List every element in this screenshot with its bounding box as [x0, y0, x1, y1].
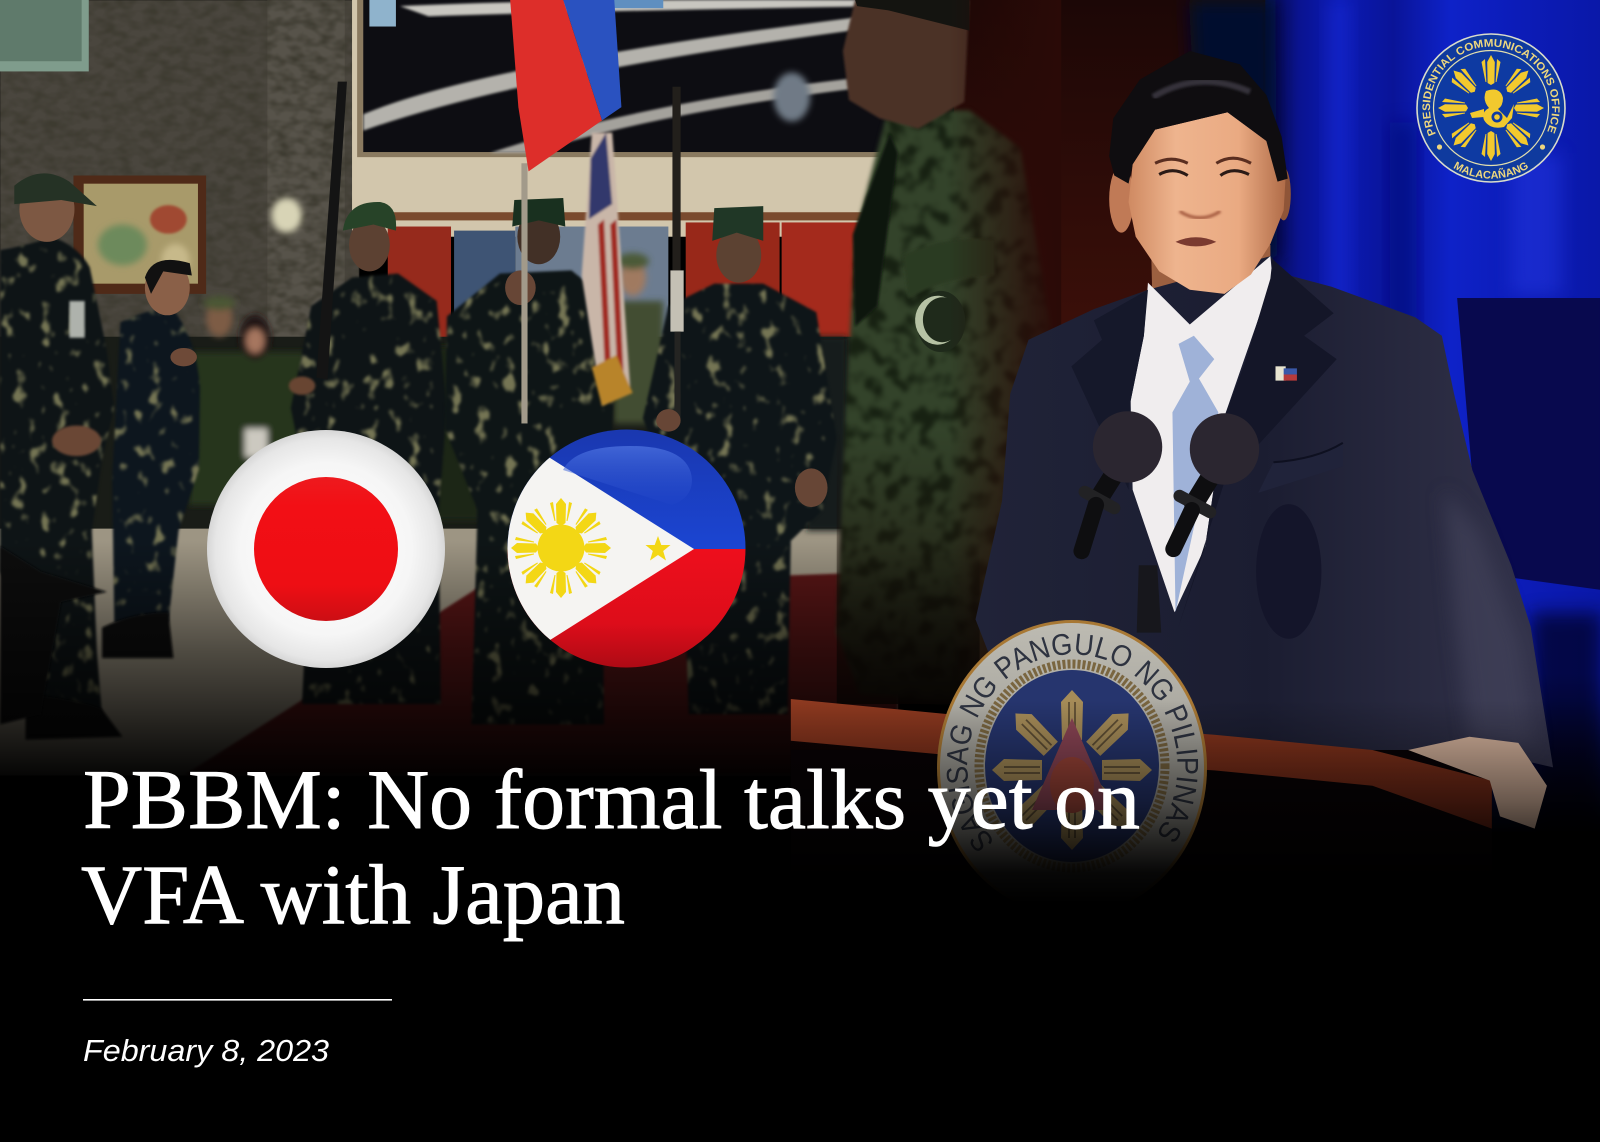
- podium presidential seal: [937, 620, 1207, 872]
- kneeling figure foreground: [0, 546, 107, 724]
- right lapel: [1186, 260, 1336, 604]
- soldier with rifle: [289, 82, 447, 704]
- white shirt: [1131, 256, 1272, 612]
- stone wall: [0, 0, 359, 347]
- date: February 8, 2023: [83, 1033, 329, 1068]
- left lapel: [1071, 290, 1148, 490]
- suit jacket: [976, 256, 1553, 767]
- red carpet: [184, 571, 898, 776]
- title line two: VFA with Japan: [81, 848, 625, 942]
- flag of Japan badge: [207, 430, 445, 668]
- soldier left one: [0, 173, 122, 740]
- president Marcos: [976, 51, 1553, 767]
- left microphone: [1082, 411, 1162, 551]
- dark area beneath podium: [791, 750, 1492, 913]
- soldier holding flag: [445, 198, 616, 724]
- seal bottom text: MALACAÑANG: [1454, 162, 1528, 179]
- blue curtain: [1189, 0, 1600, 913]
- soldier left two: [102, 260, 200, 658]
- soldier with white rifle: [643, 87, 837, 714]
- title: [81, 753, 1140, 942]
- neck: [1151, 244, 1270, 288]
- microphone mount: [1137, 565, 1161, 633]
- sun: [511, 498, 611, 598]
- right fade to black: [790, 700, 1600, 903]
- shadow on suit: [1256, 504, 1321, 639]
- wall lamp: [271, 198, 302, 233]
- seal top text: PRESIDENTIAL COMMUNICATIONS OFFICE: [1422, 39, 1560, 136]
- face: [1129, 112, 1286, 294]
- star: [646, 536, 670, 560]
- backdrop behind president: [954, 0, 1266, 324]
- right hand: [1408, 737, 1547, 829]
- seal lettering: SAGISAG NG PANGULO NG PILIPINAS: [946, 634, 1198, 851]
- red doors: [388, 212, 862, 337]
- breast pocket: [1259, 464, 1274, 492]
- flag of the Philippines badge: [490, 420, 750, 678]
- sleeve highlight: [1448, 509, 1526, 739]
- blurred green staff behind: [189, 253, 847, 531]
- lower room shadow: [0, 336, 853, 528]
- teleprompter glass: [1457, 298, 1600, 590]
- ears: [1109, 173, 1132, 233]
- title line one: PBBM: No formal talks yet on: [83, 753, 1140, 847]
- nose: [1180, 211, 1220, 218]
- divider rule: [83, 999, 392, 1001]
- floor: [0, 529, 898, 776]
- mouth: [1176, 237, 1216, 246]
- right microphone: [1173, 413, 1259, 549]
- seal sun: [992, 690, 1152, 850]
- hair: [1109, 51, 1288, 184]
- eyes and brows: [1155, 158, 1251, 176]
- framed painting: [73, 176, 206, 294]
- Philippine flag on pole: [510, 0, 621, 423]
- seal dots: [1437, 144, 1545, 150]
- US flag: [582, 133, 633, 406]
- upper centre wall: [352, 0, 903, 237]
- large striped artwork: [357, 0, 900, 157]
- gloss highlight: [563, 446, 692, 505]
- podium top rail: [791, 699, 1492, 829]
- necktie: [1172, 336, 1218, 612]
- lapel pin: [1276, 366, 1297, 381]
- bottom black band: [0, 902, 1600, 1142]
- officer in green camouflage: [837, 0, 1061, 714]
- left fade to black: [0, 541, 980, 786]
- seal sun rays: [1438, 55, 1544, 161]
- Presidential Communications Office seal: [1416, 33, 1566, 183]
- sea lion emblem: [1470, 90, 1514, 128]
